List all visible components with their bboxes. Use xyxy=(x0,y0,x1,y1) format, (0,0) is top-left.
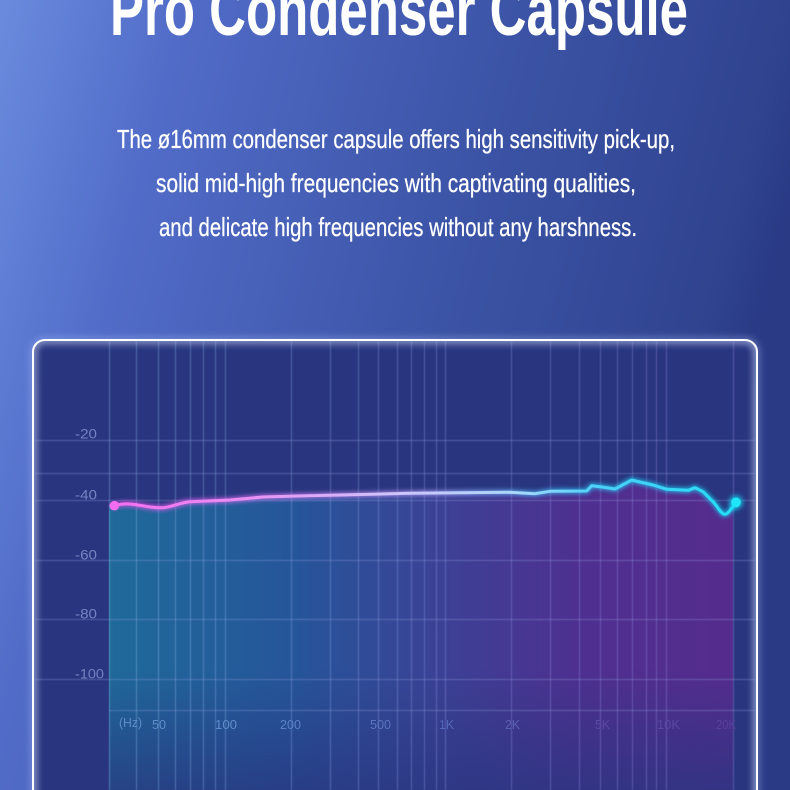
description text xyxy=(117,124,675,242)
description text: solid mid-high frequencies with captivating qualities, xyxy=(156,168,636,198)
x-axis labels: 50 xyxy=(152,717,166,732)
x-axis labels: 20K xyxy=(716,717,736,732)
x-axis labels: 5K xyxy=(595,717,610,732)
curve start dot xyxy=(110,501,119,511)
x-axis labels: 1K xyxy=(439,717,454,732)
y-axis labels: -60 xyxy=(75,548,97,562)
inner edge glow xyxy=(33,340,757,790)
curve end dot xyxy=(731,498,741,507)
panel fill xyxy=(33,340,757,790)
area under the curve xyxy=(109,480,733,790)
frequency response curve xyxy=(114,480,736,514)
x-axis labels: 200 xyxy=(280,717,301,732)
grid lines xyxy=(110,340,734,790)
panel: frequency response chart xyxy=(33,340,757,790)
curve line xyxy=(114,480,736,514)
x-axis labels: 10K xyxy=(657,717,680,732)
x-axis labels: 500 xyxy=(370,717,391,732)
description text: and delicate high frequencies without any harshness. xyxy=(159,212,637,242)
x-axis labels: 2K xyxy=(505,717,520,732)
x-axis labels: (Hz) xyxy=(119,715,142,730)
y-axis labels: -20 xyxy=(75,426,97,442)
y-axis labels: -40 xyxy=(75,488,97,502)
y-axis labels: -100 xyxy=(75,666,104,682)
panel outer glow xyxy=(33,340,757,790)
panel border xyxy=(33,340,757,790)
y-axis labels: -80 xyxy=(75,606,97,622)
curve glow xyxy=(114,480,736,514)
y-axis labels xyxy=(75,426,104,682)
curve end dot glow xyxy=(729,495,743,509)
x-axis labels: 100 xyxy=(215,717,237,732)
x-axis labels xyxy=(119,715,736,732)
